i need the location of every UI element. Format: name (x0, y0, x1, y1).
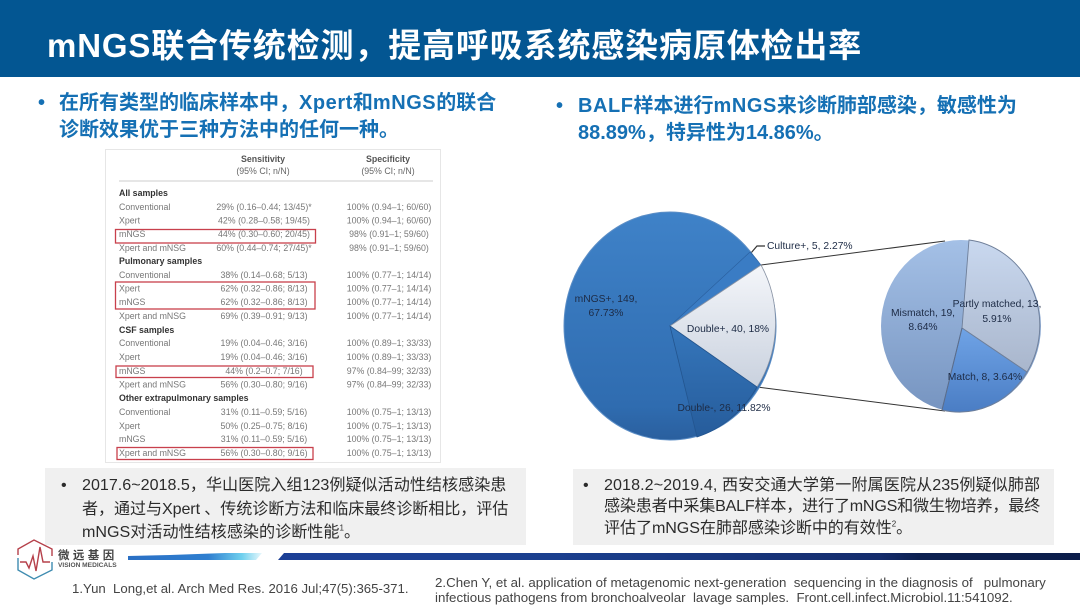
left study note: 者，通过与Xpert 、传统诊断方法和临床最终诊断相比，评估 (82, 500, 508, 518)
results table image: Other extrapulmonary samples (119, 393, 249, 403)
right key point: BALF样本进行mNGS来诊断肺部感染，敏感性为 (578, 95, 1017, 117)
results table image: 31% (0.11–0.59; 5/16) (221, 407, 307, 417)
right study note: • (583, 476, 589, 494)
results table image: mNGS (119, 434, 146, 444)
secondary pie: Mismatch, 19, (891, 308, 955, 319)
results table image: Conventional (119, 407, 170, 417)
right key point: 88.89%，特异性为14.86%。 (578, 122, 834, 144)
header banner (0, 0, 1080, 77)
results table image: 100% (0.77–1; 14/14) (347, 270, 431, 280)
results table image: 42% (0.28–0.58; 19/45) (218, 216, 310, 226)
results table image: Sensitivity (241, 154, 285, 164)
left key point: • (38, 92, 45, 114)
main pie: 67.73% (589, 308, 623, 319)
left key point: 在所有类型的临床样本中，Xpert和mNGS的联合 (59, 92, 496, 114)
results table image: mNGS (119, 229, 146, 239)
main pie: Double+, 40, 18% (687, 324, 769, 335)
results table image: mNGS (119, 366, 146, 376)
results table image: 31% (0.11–0.59; 5/16) (221, 434, 307, 444)
results table image: (95% CI; n/N) (236, 166, 290, 176)
results table image: 60% (0.44–0.74; 27/45)* (216, 243, 312, 253)
main pie (564, 212, 853, 440)
results table image: 100% (0.75–1; 13/13) (347, 421, 431, 431)
logo (17, 539, 118, 580)
connector lines (751, 241, 945, 411)
results table image (105, 149, 441, 463)
results table image: Xpert and mNSG (119, 448, 186, 458)
reference 2: infectious pathogens from bronchoalveolar lavage samples. Front.cell.infect.Microbiol.11:541092. (435, 590, 1013, 605)
left key point (38, 92, 496, 141)
left study note: 2017.6~2018.5，华山医院入组123例疑似活动性结核感染患 (82, 476, 506, 494)
logo icon (17, 539, 53, 580)
secondary pie: 5.91% (982, 314, 1012, 325)
results table image: Conventional (119, 202, 170, 212)
footer decorative band (128, 553, 1080, 560)
left study note: mNGS对活动性结核感染的诊断性能1。 (82, 523, 360, 541)
right study note: 感染患者中采集BALF样本，进行了mNGS和微生物培养，最终 (604, 497, 1040, 515)
results table image: 44% (0.30–0.60; 20/45) (218, 229, 310, 239)
right study note (573, 469, 1054, 545)
logo text: 微远基因 (58, 550, 118, 562)
results table image: Conventional (119, 338, 170, 348)
results table image: 100% (0.94–1; 60/60) (347, 202, 431, 212)
results table image: Xpert and mNSG (119, 380, 186, 390)
results table image: 69% (0.39–0.91; 9/13) (220, 311, 308, 321)
results table image: Xpert (119, 352, 141, 362)
results table image: 56% (0.30–0.80; 9/16) (220, 448, 308, 458)
results table image: (95% CI; n/N) (361, 166, 415, 176)
results table image: 100% (0.94–1; 60/60) (347, 216, 431, 226)
results table image: Specificity (366, 154, 410, 164)
results table image: 98% (0.91–1; 59/60) (349, 243, 429, 253)
results table image: Pulmonary samples (119, 256, 202, 266)
left study note (45, 468, 526, 545)
right study note: 2018.2~2019.4, 西安交通大学第一附属医院从235例疑似肺部 (604, 476, 1040, 494)
main pie: Double-, 26, 11.82% (677, 403, 771, 414)
left key point: 诊断效果优于三种方法中的任何一种。 (59, 119, 399, 141)
logo: VISION MEDICALS (58, 562, 117, 569)
results table image: mNGS (119, 297, 146, 307)
results table image: 100% (0.77–1; 14/14) (347, 284, 431, 294)
results table image: Xpert and mNSG (119, 311, 186, 321)
results table image: 100% (0.89–1; 33/33) (347, 352, 431, 362)
results table image: 56% (0.30–0.80; 9/16) (220, 380, 308, 390)
results table image: CSF samples (119, 325, 174, 335)
results table image: 44% (0.2–0.7; 7/16) (225, 366, 303, 376)
secondary pie: Partly matched, 13, (953, 299, 1041, 310)
results table image: 19% (0.04–0.46; 3/16) (220, 338, 308, 348)
results table image: All samples (119, 188, 168, 198)
results table image: 50% (0.25–0.75; 8/16) (220, 421, 308, 431)
reference 1: 1.Yun Long,et al. Arch Med Res. 2016 Jul;47(5):365-371. (72, 581, 408, 596)
results table image: 100% (0.75–1; 13/13) (347, 434, 431, 444)
reference 2: 2.Chen Y, et al. application of metagenomic next-generation sequencing in the diagnosis of pulmonary (435, 575, 1046, 590)
results table image: 97% (0.84–99; 32/33) (347, 366, 431, 376)
results table image: 100% (0.77–1; 14/14) (347, 297, 431, 307)
results table image: 38% (0.14–0.68; 5/13) (220, 270, 308, 280)
left study note: • (61, 476, 67, 494)
results table image: Xpert and mNSG (119, 243, 186, 253)
results table image: 97% (0.84–99; 32/33) (347, 380, 431, 390)
results table image: Conventional (119, 270, 170, 280)
results table image: 100% (0.75–1; 13/13) (347, 407, 431, 417)
results table image: 100% (0.75–1; 13/13) (347, 448, 431, 458)
results table image: 29% (0.16–0.44; 13/45)* (216, 202, 312, 212)
secondary pie: 8.64% (908, 322, 938, 333)
results table image: Xpert (119, 284, 141, 294)
right key point: • (556, 95, 563, 117)
main pie: Culture+, 5, 2.27% (767, 241, 853, 252)
results table image: Xpert (119, 216, 141, 226)
results table image: 98% (0.91–1; 59/60) (349, 229, 429, 239)
reference 2 (435, 575, 1046, 605)
results table image: Xpert (119, 421, 141, 431)
results table image: 100% (0.89–1; 33/33) (347, 338, 431, 348)
results table image: 62% (0.32–0.86; 8/13) (220, 297, 308, 307)
title: mNGS联合传统检测，提高呼吸系统感染病原体检出率 (47, 27, 862, 64)
results table image: 100% (0.77–1; 14/14) (347, 311, 431, 321)
secondary pie (881, 240, 1041, 412)
results table image: 62% (0.32–0.86; 8/13) (220, 284, 308, 294)
results table image: 19% (0.04–0.46; 3/16) (220, 352, 308, 362)
secondary pie: Match, 8, 3.64% (948, 372, 1022, 383)
pie of pie chart (564, 212, 1041, 440)
right key point (556, 94, 1017, 144)
main pie: mNGS+, 149, (575, 294, 637, 305)
right study note: 评估了mNGS在肺部感染诊断中的有效性2。 (604, 519, 912, 537)
